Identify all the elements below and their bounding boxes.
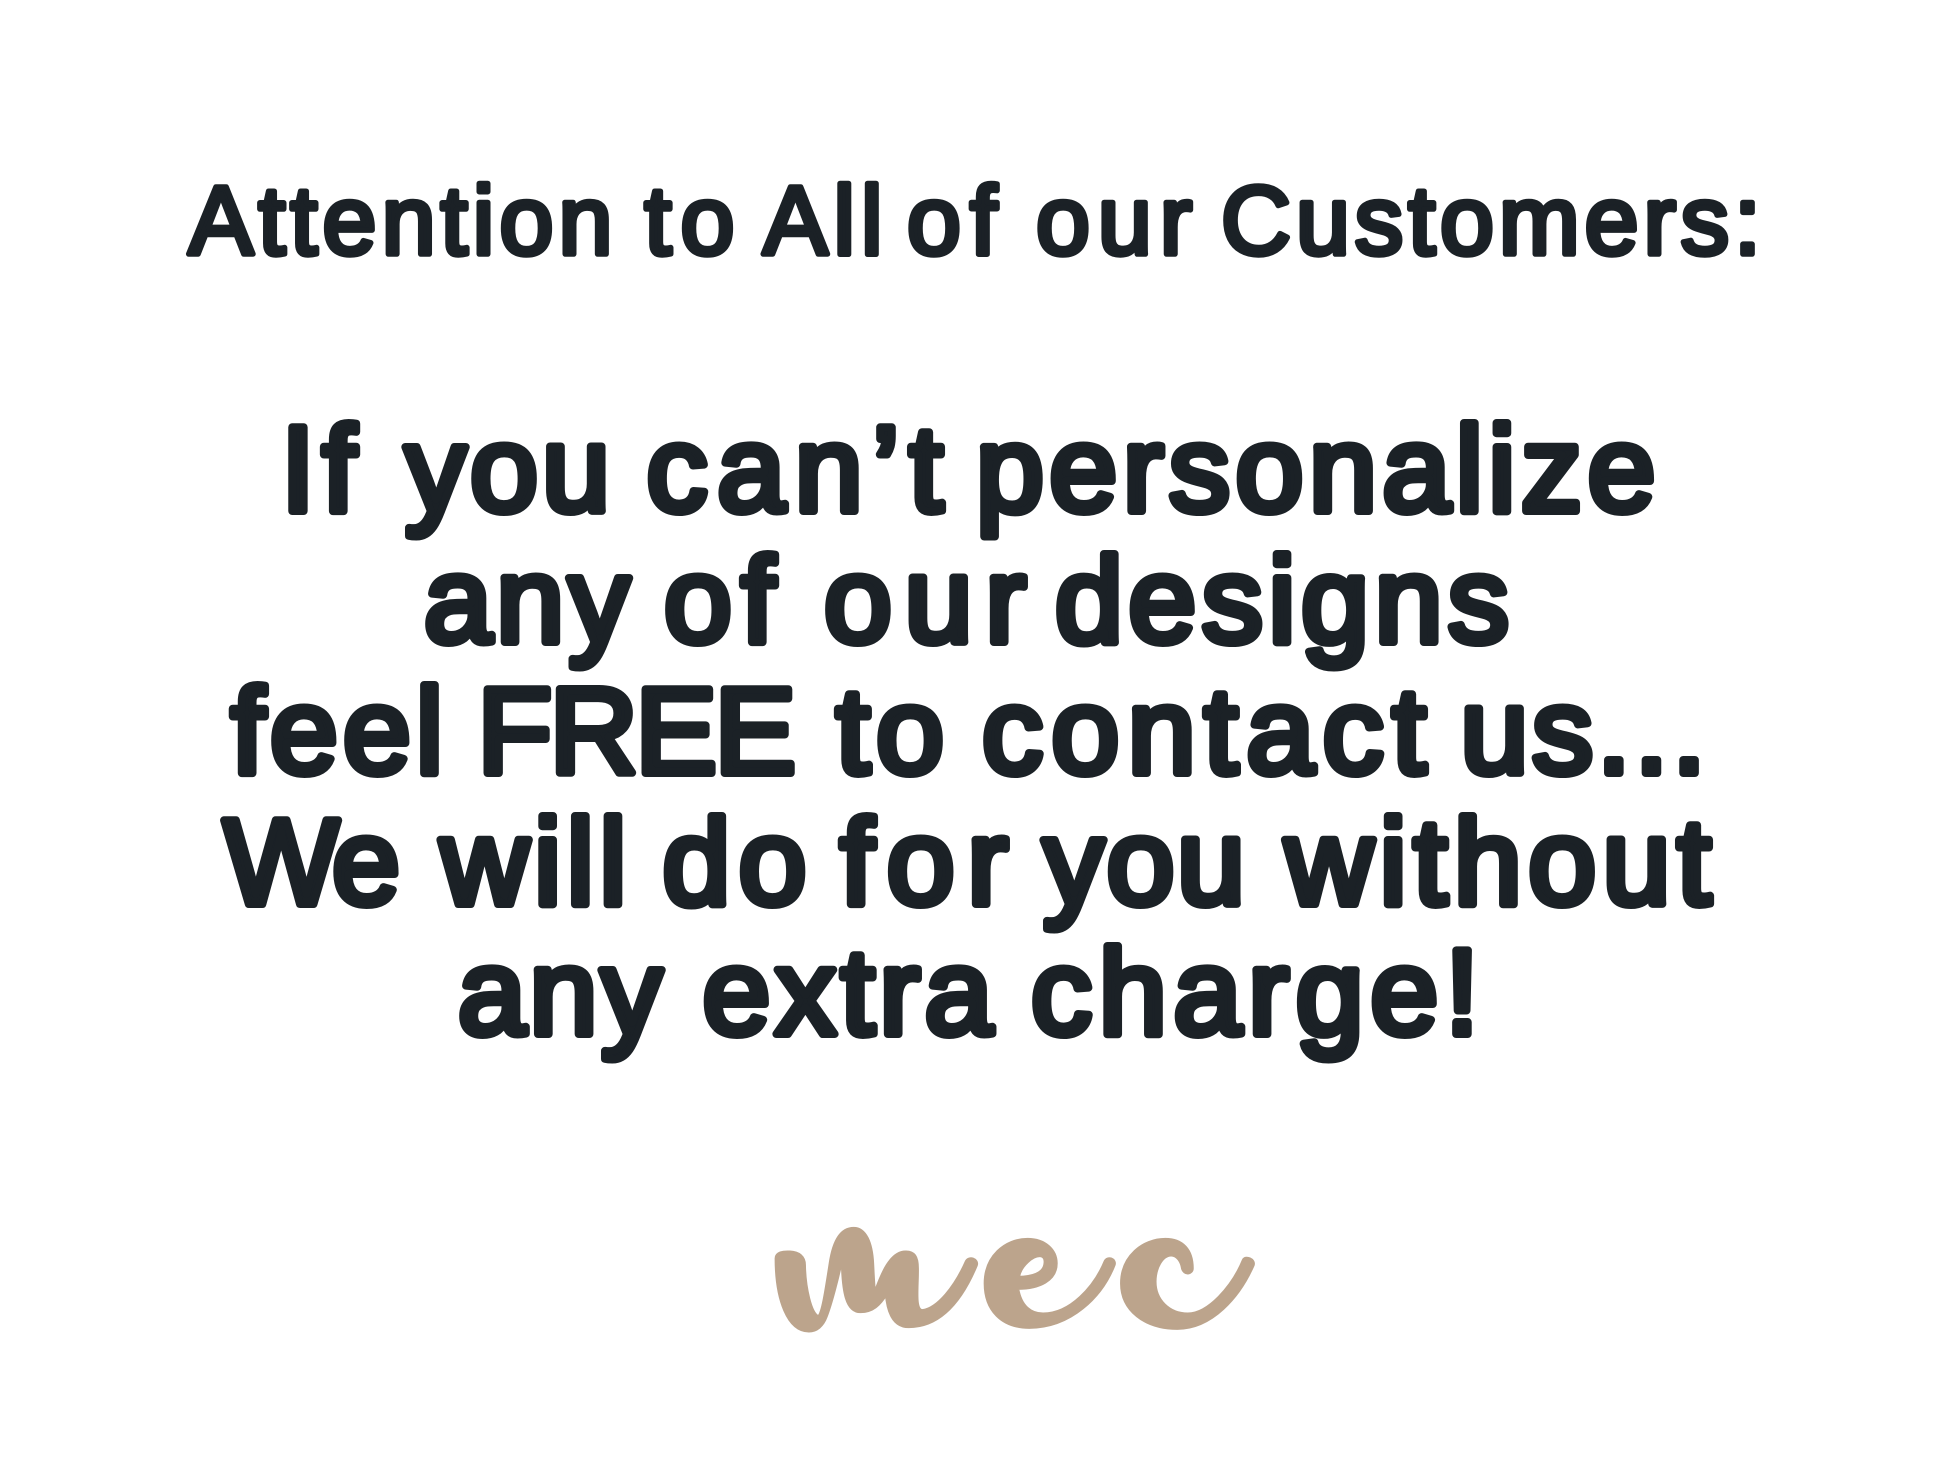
- title: Attention: [188, 166, 612, 275]
- message line 1: can’t: [646, 401, 943, 537]
- message line 3: [231, 663, 1706, 799]
- title: [188, 166, 1761, 275]
- message line 3: feel: [231, 663, 443, 799]
- message line 4: for: [840, 794, 1008, 930]
- message line 1: you: [405, 401, 610, 537]
- title: All: [763, 166, 882, 275]
- title: of: [907, 166, 998, 275]
- message line 4: will: [440, 794, 626, 930]
- title: Customers:: [1221, 166, 1761, 275]
- message line 5: [458, 924, 1479, 1060]
- message line 2: [424, 532, 1509, 668]
- message line 4: We: [224, 794, 400, 930]
- message line 3: FREE: [478, 663, 796, 799]
- message line 2: our: [824, 532, 1026, 668]
- logo: mec script mark: [776, 1228, 1253, 1331]
- message line 1: If: [281, 401, 357, 537]
- message line 1: [281, 401, 1656, 537]
- message line 4: without: [1284, 794, 1711, 930]
- message line 2: designs: [1055, 532, 1509, 668]
- message line 5: extra: [702, 924, 993, 1060]
- message line 3: to: [836, 663, 944, 799]
- message line 3: contact: [982, 663, 1426, 799]
- title: to: [644, 166, 734, 275]
- message line 4: do: [662, 794, 806, 930]
- main message: [224, 401, 1711, 1060]
- message line 4: [224, 794, 1711, 930]
- message line 5: any: [458, 924, 662, 1060]
- message line 3: us...: [1460, 663, 1706, 799]
- message line 5: charge!: [1031, 924, 1479, 1060]
- title: our: [1036, 166, 1192, 275]
- message line 2: of: [664, 532, 776, 668]
- message line 1: personalize: [976, 401, 1656, 537]
- message line 2: any: [424, 532, 630, 668]
- message line 4: you: [1043, 794, 1245, 930]
